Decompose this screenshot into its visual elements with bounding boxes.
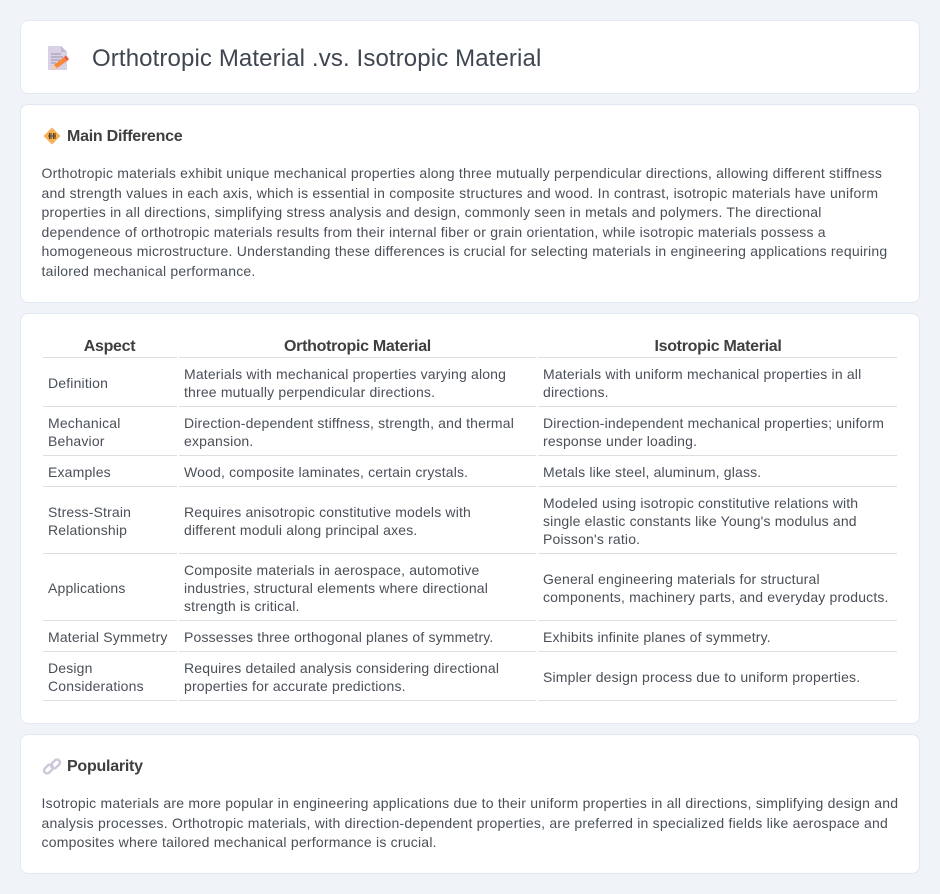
text: main difference paragraph [42,165,887,279]
panel: comparison table [20,313,920,724]
icon: chain link [43,758,61,775]
row: mechanical behavior: Direction-dependent stiffness, strength, and thermal [184,415,514,431]
text: main difference paragraph: Orthotropic materials exhibit unique mechanical properties along three mutually perpendicular directions, allowing different stiffness [42,165,882,181]
row: stress-strain relationship [48,495,858,547]
row: mechanical behavior: Behavior [48,433,105,449]
row: examples: Metals like steel, aluminum, glass. [543,464,761,480]
table column headers [84,338,782,355]
header panel [20,20,920,94]
heading: popularity: Popularity [67,758,143,775]
row: mechanical behavior: Direction-independent mechanical properties; uniform [543,415,884,431]
row: mechanical behavior: Mechanical [48,415,121,431]
row: definition: three mutually perpendicular directions. [184,384,435,400]
row: design considerations [48,660,860,694]
icon: document with pencil [48,46,69,70]
row: design considerations: Design [48,660,93,676]
text: main difference paragraph: properties in all directions, simplifying stress analysis and design, commonly seen in metals and polymers. The directional [42,204,822,220]
row: design considerations: Simpler design process due to uniform properties. [543,669,860,685]
text: popularity paragraph: analysis processes. Orthotropic materials, with direction-dependent properties, are preferred in specialized fields like aerospace and [42,815,888,831]
row: mechanical behavior: expansion. [184,433,253,449]
row: stress-strain relationship: Stress-Strain [48,504,131,520]
row: definition: directions. [543,384,609,400]
row: definition: Materials with uniform mechanical properties in all [543,366,861,382]
row: design considerations: properties for accurate predictions. [184,678,406,694]
row: stress-strain relationship: Modeled using isotropic constitutive relations with [543,495,858,511]
row: design considerations: Considerations [48,678,144,694]
text: main difference paragraph: dependence of orthotropic materials results from their internal fiber or grain orientation, while isotropic materials possess a [42,224,826,240]
row: stress-strain relationship: Poisson's ratio. [543,531,640,547]
row: mechanical behavior [48,415,884,449]
row: material symmetry: Material Symmetry [48,629,168,645]
row: definition: Definition [48,375,108,391]
panel: popularity [20,734,920,874]
row: applications: components, machinery parts, and everyday products. [543,589,889,605]
row: definition [48,366,861,400]
row: applications [48,562,889,614]
row: stress-strain relationship: different moduli along principal axes. [184,522,417,538]
table column headers: Orthotropic Material [284,338,431,355]
row: examples: Examples [48,464,111,480]
row: applications: General engineering materials for structural [543,571,820,587]
row: material symmetry: Exhibits infinite planes of symmetry. [543,629,771,645]
text: main difference paragraph: and strength values in each axis, which is essential in composite structures and wood. In contrast, isotropic materials have uniform [42,185,878,201]
table column headers: Aspect [84,338,135,355]
row: applications: Composite materials in aerospace, automotive [184,562,479,578]
row: material symmetry [48,629,771,645]
panel: main difference [20,104,920,303]
icon: orange diamond [44,128,60,144]
row: examples: Wood, composite laminates, certain crystals. [184,464,468,480]
text: main difference paragraph: tailored mechanical performance. [42,263,256,279]
text: popularity paragraph [42,795,898,850]
heading: main difference: Main Difference [67,128,182,145]
row: design considerations: Requires detailed analysis considering directional [184,660,499,676]
text: popularity paragraph: Isotropic materials are more popular in engineering applications due to their uniform properties in all directions, simplifying design and [42,795,898,811]
row: applications: industries, structural elements where directional [184,580,488,596]
row: applications: strength is critical. [184,598,300,614]
row: stress-strain relationship: Relationship [48,522,127,538]
row: definition: Materials with mechanical properties varying along [184,366,506,382]
text: main difference paragraph: homogeneous microstructure. Understanding these differences is crucial for selecting materials in engineering applications requiring [42,243,887,259]
row: material symmetry: Possesses three orthogonal planes of symmetry. [184,629,493,645]
row: examples [48,464,761,480]
row: mechanical behavior: response under loading. [543,433,697,449]
table column headers: Isotropic Material [654,338,782,355]
row: stress-strain relationship: Requires anisotropic constitutive models with [184,504,471,520]
text: popularity paragraph: composites where tailored mechanical performance is crucial. [42,834,437,850]
row: stress-strain relationship: single elastic constants like Young's modulus and [543,513,857,529]
row: applications: Applications [48,580,126,596]
title: Orthotropic Material .vs. Isotropic Material [92,45,541,72]
